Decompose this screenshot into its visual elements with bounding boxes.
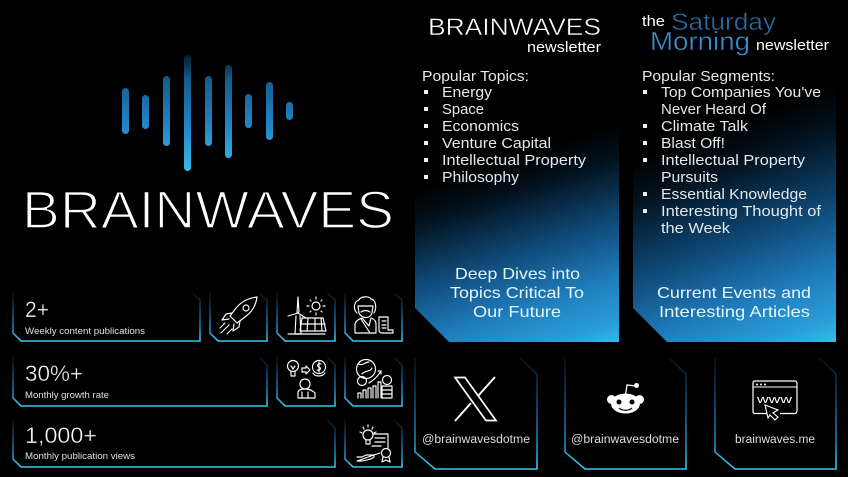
popular topics list: Energy: [442, 85, 493, 101]
logo wordmark: BRAINWAVES: [22, 181, 394, 240]
newsletter title: [428, 14, 601, 56]
newsletter title: newsletter: [527, 39, 601, 56]
tile: website: [715, 358, 836, 469]
panel gradient background: [415, 60, 619, 342]
popular topics list: Venture Capital: [442, 136, 551, 152]
tile: X social: @brainwavesdotme: [422, 434, 530, 446]
tile: wind and solar icon: [277, 293, 335, 341]
tagline: Current Events and: [657, 285, 811, 302]
popular segments list: Pursuits: [661, 170, 718, 186]
popular segments list: Interesting Thought of: [661, 204, 822, 220]
panel gradient background: [633, 60, 836, 342]
icon: browser window: www: [756, 394, 792, 406]
panel: Saturday Morning newsletter: [633, 9, 836, 342]
popular segments list: [642, 69, 822, 237]
newsletter title: Saturday: [671, 9, 776, 36]
stat: monthly growth rate: [13, 357, 267, 406]
popular topics list: Economics: [442, 119, 519, 135]
popular segments list: the Week: [661, 221, 731, 237]
popular topics list: Philosophy: [442, 170, 520, 186]
stat: monthly publication views: Monthly publication views: [25, 451, 135, 462]
tile: Reddit social: @brainwavesdotme: [571, 434, 679, 446]
stat: weekly content publications: [13, 293, 200, 341]
stat: monthly growth rate: 30%+: [25, 361, 83, 386]
tagline: [657, 285, 811, 321]
newsletter title: Morning: [650, 26, 750, 56]
panel: Brainwaves newsletter: [415, 14, 619, 342]
newsletter title: the: [642, 13, 665, 30]
tile: Reddit social: [565, 358, 686, 469]
tagline: Topics Critical To: [450, 285, 584, 302]
stat: monthly publication views: 1,000+: [25, 423, 97, 448]
tile: website: brainwaves.me: [735, 434, 815, 446]
popular segments list: Intellectual Property: [661, 153, 806, 169]
tile: philosopher icon: [345, 293, 402, 341]
icon: X logo: [455, 377, 496, 421]
tile: patent icon: [345, 420, 402, 467]
popular topics list: Popular Topics:: [422, 69, 529, 85]
tile: rocket icon: [210, 293, 267, 341]
popular segments list: Climate Talk: [661, 119, 749, 135]
icon: Reddit logo: [607, 383, 644, 414]
popular segments list: Essential Knowledge: [661, 187, 807, 203]
tagline: Deep Dives into: [455, 266, 580, 283]
logo: sound wave: [122, 55, 293, 171]
popular segments list: Top Companies You've: [661, 85, 821, 101]
tagline: Our Future: [473, 304, 561, 321]
popular topics list: Space: [442, 102, 484, 118]
newsletter title: BRAINWAVES: [428, 14, 601, 41]
popular topics list: Intellectual Property: [442, 153, 587, 169]
popular segments list: Popular Segments:: [642, 69, 775, 85]
tagline: Interesting Articles: [659, 304, 810, 321]
popular segments list: Blast Off!: [661, 136, 725, 152]
newsletter title: [642, 9, 829, 56]
popular segments list: Never Heard Of: [661, 102, 767, 118]
stat: monthly growth rate: Monthly growth rate: [25, 390, 109, 401]
tile: global growth icon: [345, 357, 402, 406]
tile: idea to money icon: [277, 357, 335, 406]
tagline: [450, 266, 584, 321]
stat: weekly content publications: Weekly content publications: [25, 326, 145, 337]
stat: weekly content publications: 2+: [25, 297, 49, 322]
newsletter title: newsletter: [756, 37, 829, 54]
stat: monthly publication views: [13, 420, 335, 467]
popular topics list: [422, 69, 587, 186]
tile: X social: [415, 358, 537, 469]
